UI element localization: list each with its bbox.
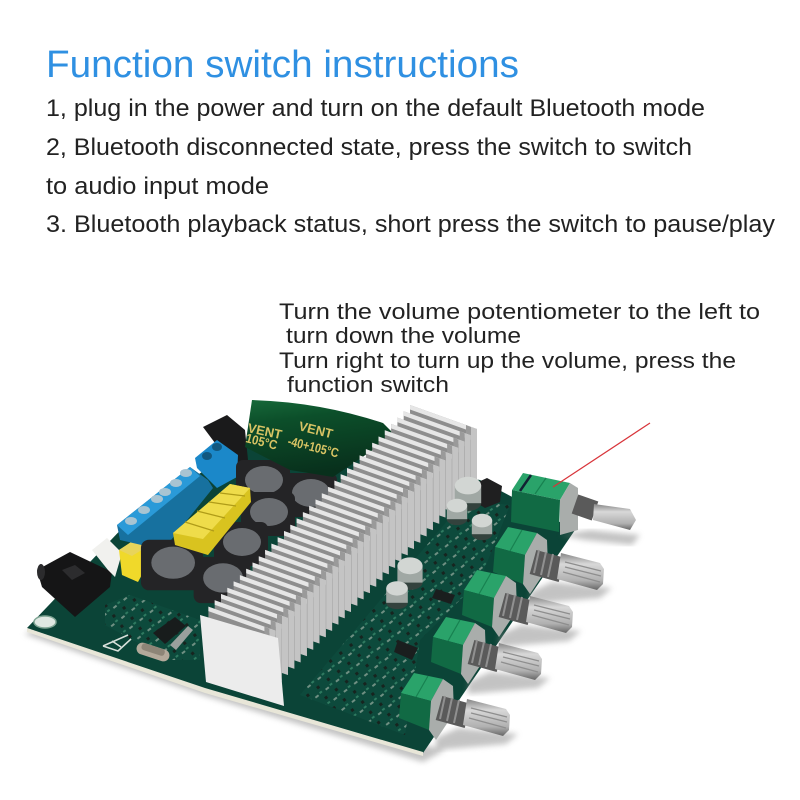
board shadow <box>24 628 445 762</box>
amplifier board photo illustration <box>24 400 640 762</box>
volume potentiometer callout text <box>279 299 760 397</box>
potentiometer 4 <box>431 617 550 694</box>
instructions text block <box>46 95 775 238</box>
antenna trace <box>103 635 131 651</box>
potentiometer 2 <box>493 527 612 604</box>
crystal <box>135 641 171 663</box>
capacitor print <box>244 418 341 461</box>
blue 2-way terminal <box>195 440 238 488</box>
blue 6-way terminal <box>117 467 213 550</box>
yellow capacitor single <box>119 535 153 582</box>
bluetooth chip <box>153 617 193 650</box>
potentiometer 5 <box>399 673 518 750</box>
callout line 3: Turn right to turn up the volume, press the <box>279 348 736 373</box>
capacitor print: VENT <box>246 420 283 442</box>
right board capacitors and inductor <box>386 477 502 609</box>
left SMD area <box>105 595 200 660</box>
yellow capacitor row <box>173 484 251 555</box>
callout line 4: function switch <box>287 372 449 397</box>
potentiometer 3 <box>462 570 581 647</box>
instruction 2 line 1: 2, Bluetooth disconnected state, press the switch to switch <box>46 134 692 161</box>
instruction 2 line 2: to audio input mode <box>46 173 269 200</box>
audio jack <box>37 552 112 617</box>
right board chip 1 <box>432 589 455 604</box>
capacitor print: VENT <box>297 418 335 441</box>
instruction 1: 1, plug in the power and turn on the default Bluetooth mode <box>46 95 705 122</box>
heat sink end face <box>200 615 284 706</box>
DC power jack <box>203 415 248 470</box>
large green capacitor <box>244 400 395 477</box>
right SMD area <box>300 500 510 735</box>
callout line 2: turn down the volume <box>286 323 521 348</box>
title: Function switch instructions <box>46 44 519 86</box>
inductors <box>141 460 337 603</box>
instruction 3: 3. Bluetooth playback status, short press the switch to pause/play <box>46 211 775 238</box>
white connector <box>92 538 122 577</box>
circuit board <box>27 440 575 756</box>
aluminium heat sink <box>200 405 477 706</box>
capacitor print: -40+105°C <box>286 433 341 461</box>
callout line 1: Turn the volume potentiometer to the left to <box>279 299 760 324</box>
mounting hole <box>34 616 56 628</box>
red pointer line to potentiometer <box>553 423 650 487</box>
right board chip 2 <box>394 640 418 660</box>
potentiometer 1 (top) <box>511 473 640 545</box>
capacitor print: 105°C <box>244 430 279 453</box>
